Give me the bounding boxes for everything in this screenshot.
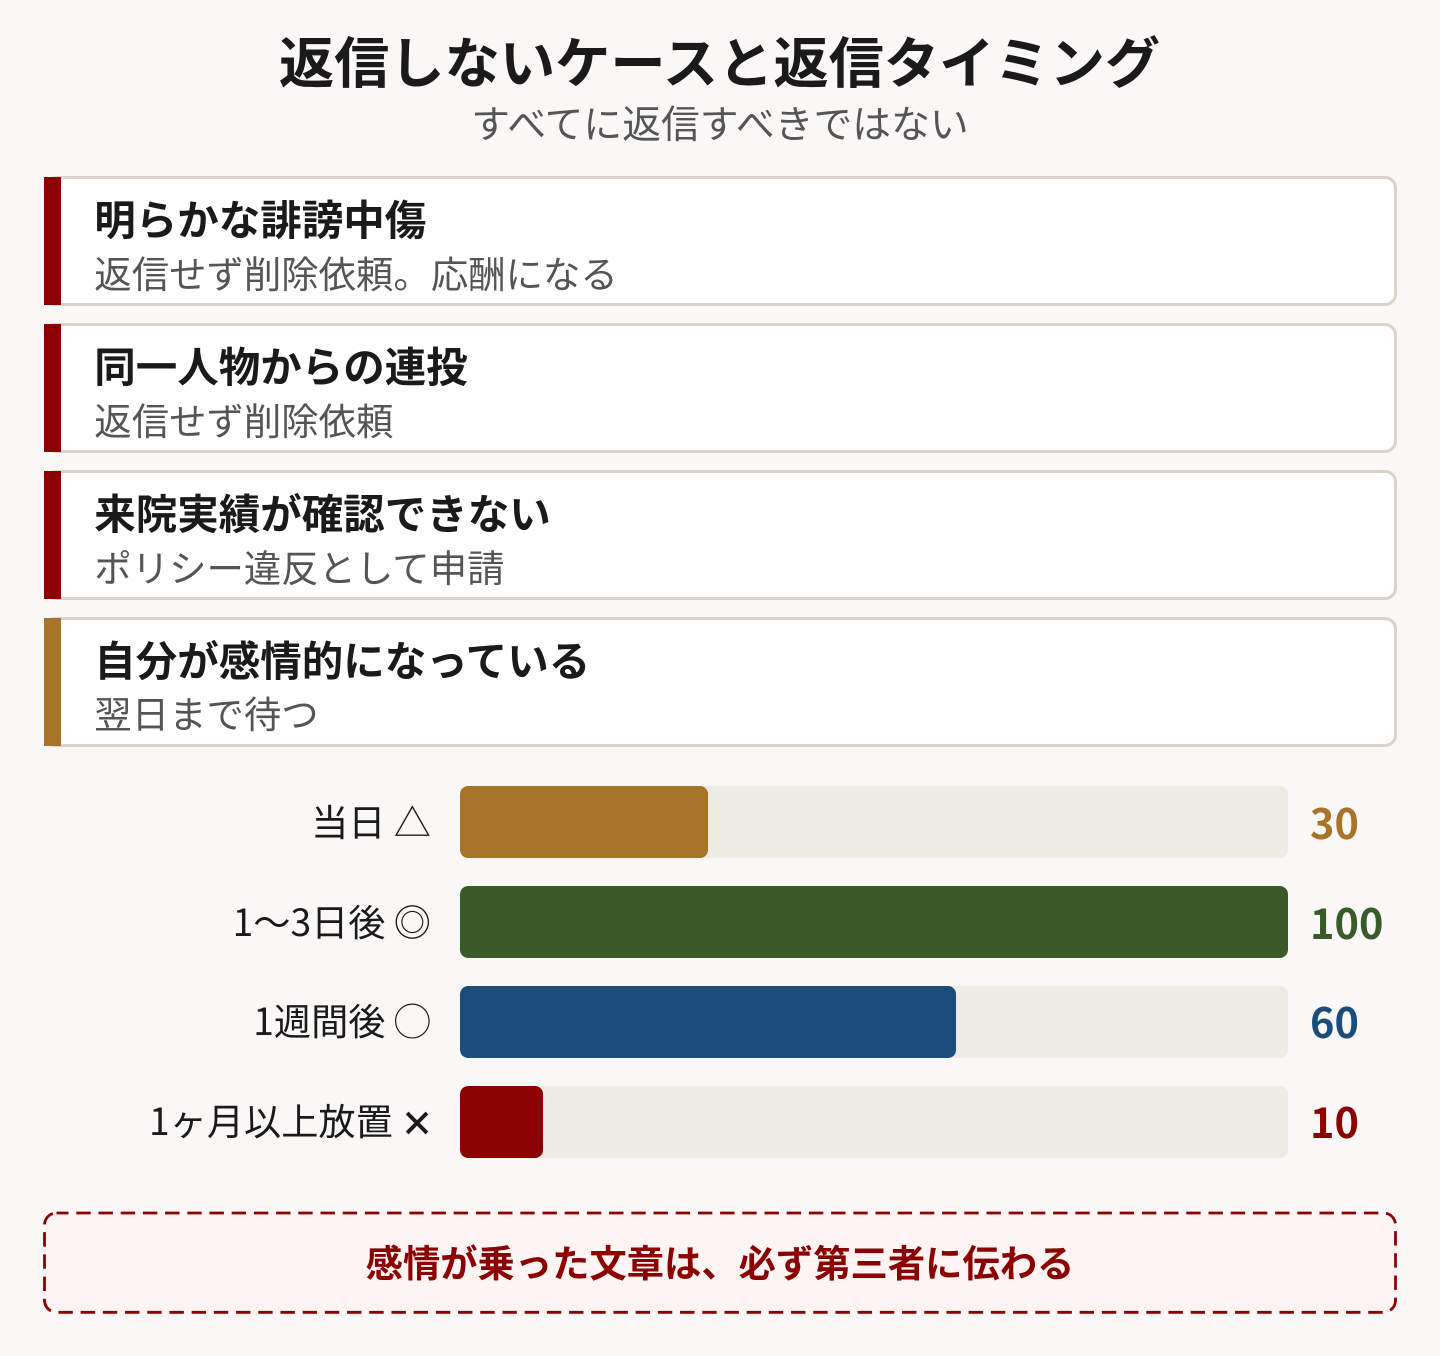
case 3 description: ポリシー違反として申請	[94, 539, 504, 593]
bar: 1 month 10	[460, 1086, 1288, 1158]
case 1 description: 返信せず削除依頼。応酬になる	[94, 245, 618, 299]
case 4 description: 翌日まで待つ	[94, 685, 319, 739]
value 10: 10	[1310, 1090, 1359, 1150]
bar: same day 30	[460, 786, 1288, 858]
callout	[43, 1212, 1397, 1314]
callout: 感情が乗った文章は、必ず第三者に伝わる	[366, 1234, 1074, 1288]
bar label: 1 month or more: 1ヶ月以上放置 ×	[149, 1092, 433, 1146]
bar label: 1 week: 1週間後 ◯	[253, 992, 431, 1046]
case 2 description: 返信せず削除依頼	[94, 392, 393, 446]
bar: 1 week 60	[460, 986, 1288, 1058]
panel: case 4	[44, 617, 1397, 747]
case 3 heading: 来院実績が確認できない	[94, 481, 551, 541]
case 2 heading: 同一人物からの連投	[94, 334, 468, 394]
subtitle: すべてに返信すべきではない	[471, 94, 969, 150]
value 100: 100	[1310, 891, 1383, 951]
value 30: 30	[1310, 791, 1359, 851]
case 4 heading: 自分が感情的になっている	[94, 628, 590, 688]
case 1 heading: 明らかな誹謗中傷	[94, 187, 426, 247]
bar label: 1-3 days: 1〜3日後 ◎	[233, 893, 431, 947]
panel: case 2	[44, 323, 1397, 453]
bar label: same day: 当日 △	[311, 793, 431, 847]
bar: 1-3 days 100	[460, 886, 1288, 958]
value 60: 60	[1310, 990, 1359, 1050]
title: 返信しないケースと返信タイミング	[279, 19, 1160, 99]
panel: case 1	[44, 176, 1397, 306]
panel: case 3	[44, 470, 1397, 600]
